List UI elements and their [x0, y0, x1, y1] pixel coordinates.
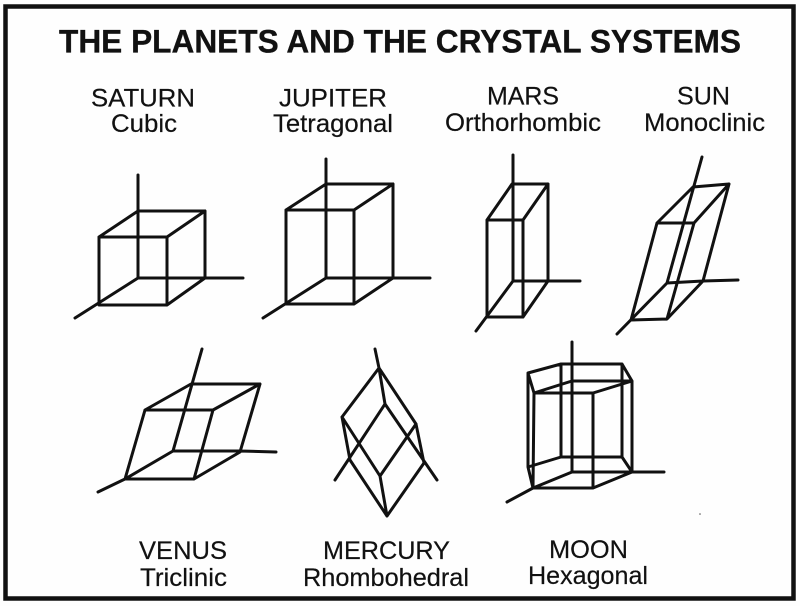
label: Mars Orthorhombic: Orthorhombic — [445, 109, 601, 137]
label: Sun Monoclinic: Monoclinic — [644, 109, 765, 137]
label: Mars Orthorhombic: MARS — [487, 82, 559, 110]
label: Jupiter Tetragonal: JUPITER — [279, 84, 387, 112]
crystal: hexagonal — [507, 342, 664, 502]
crystal: tetragonal — [263, 159, 430, 318]
label: Mercury Rhombohedral: MERCURY — [323, 537, 450, 565]
label: Jupiter Tetragonal — [273, 84, 393, 138]
label: Saturn Cubic: Cubic — [111, 110, 177, 138]
label: Saturn Cubic: SATURN — [91, 84, 195, 112]
label: Moon Hexagonal — [528, 536, 648, 590]
title: THE PLANETS AND THE CRYSTAL SYSTEMS — [59, 24, 741, 60]
label: Sun Monoclinic: SUN — [677, 82, 730, 110]
label: Saturn Cubic — [91, 84, 195, 138]
crystal: cubic — [75, 175, 243, 318]
crystal: orthorhombic — [476, 155, 580, 331]
label: Venus Triclinic: Triclinic — [140, 564, 227, 592]
crystal: rhombohedral — [335, 349, 437, 516]
label: Moon Hexagonal: Hexagonal — [528, 562, 648, 590]
label: Jupiter Tetragonal: Tetragonal — [273, 110, 393, 138]
label: Mars Orthorhombic — [445, 82, 601, 137]
crystal: triclinic — [98, 349, 276, 492]
label: Mercury Rhombohedral — [303, 537, 469, 592]
crystal: monoclinic — [617, 157, 738, 334]
label: Mercury Rhombohedral: Rhombohedral — [303, 564, 469, 592]
label: Venus Triclinic — [139, 537, 227, 592]
label: Moon Hexagonal: MOON — [549, 536, 628, 564]
label: Venus Triclinic: VENUS — [139, 537, 227, 565]
label: Sun Monoclinic — [644, 82, 765, 137]
